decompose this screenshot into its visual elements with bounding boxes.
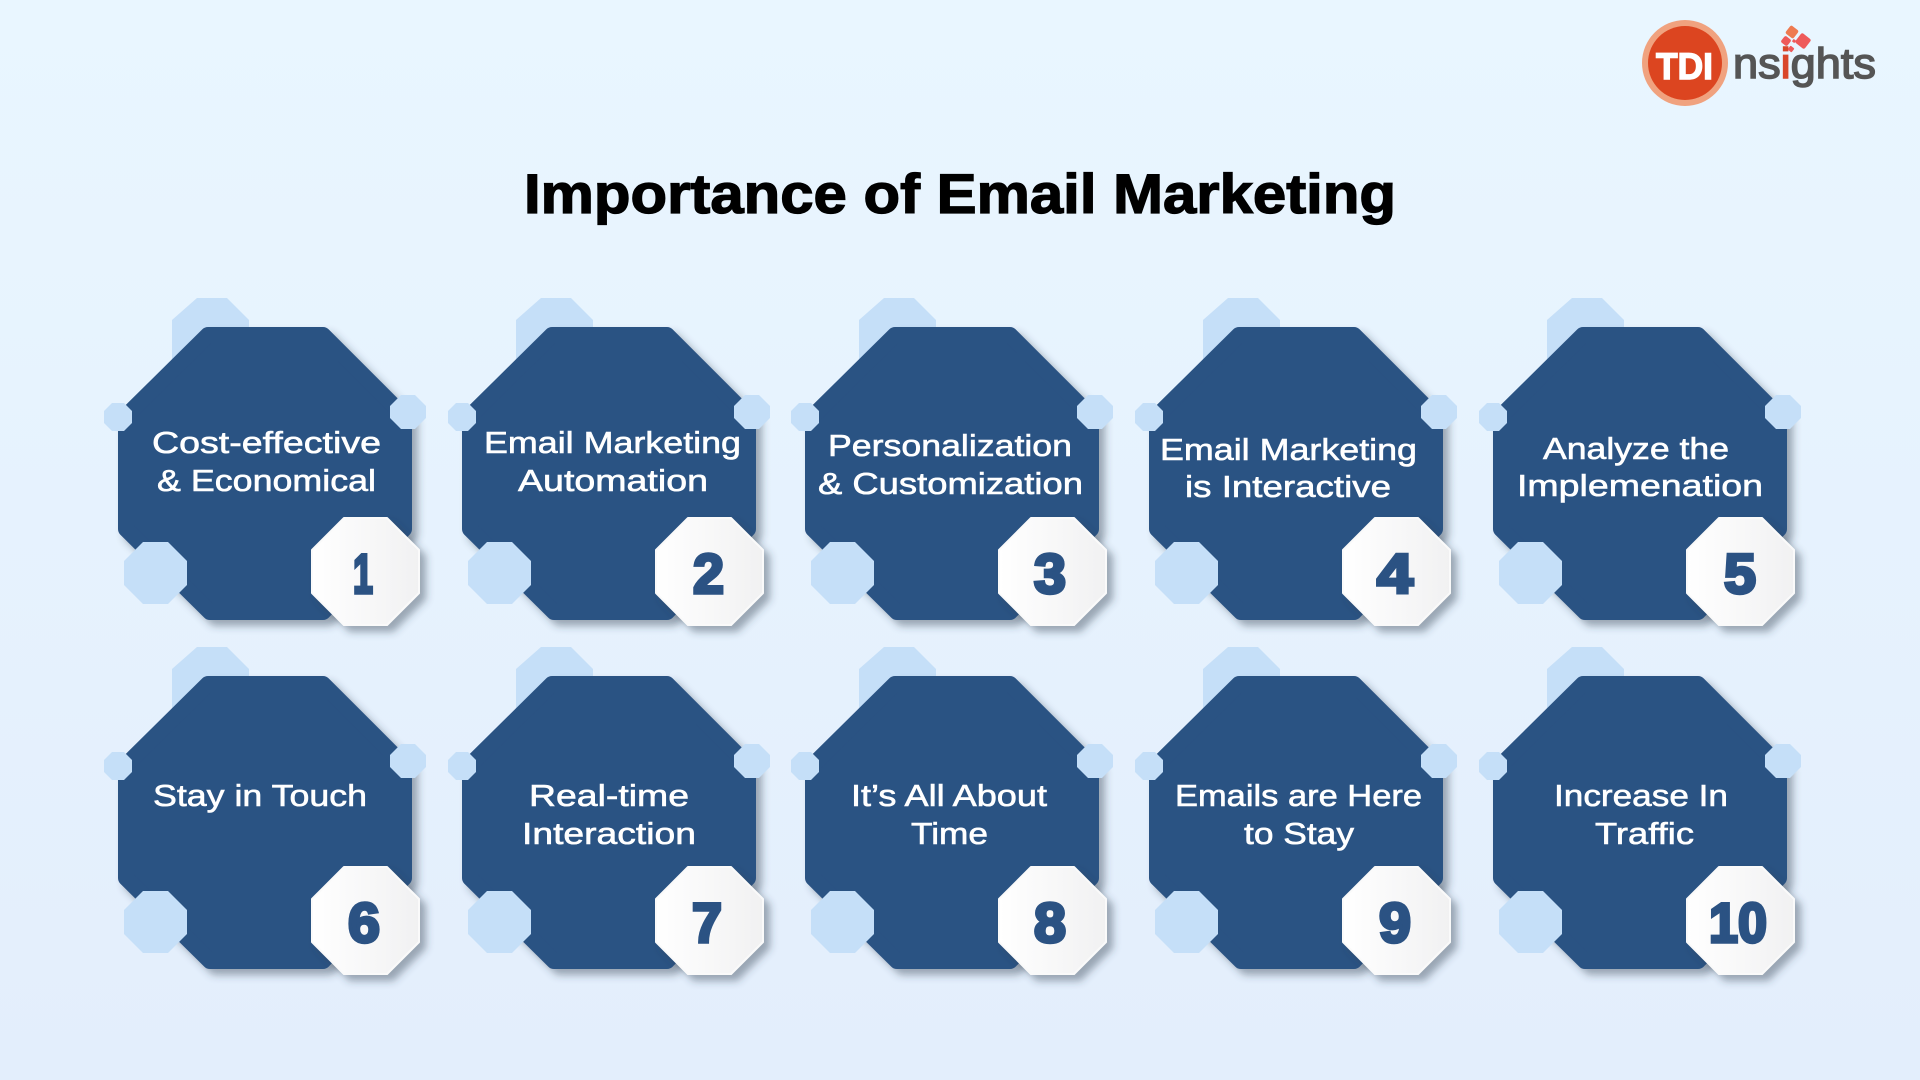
number 5: 5 [1724, 542, 1756, 605]
card text: Increase In [1554, 778, 1728, 813]
card text: Time [911, 816, 988, 851]
number 8: 8 [1034, 891, 1066, 954]
card text: Emails are Here [1175, 778, 1422, 813]
card text [522, 778, 696, 851]
number 10: 10 [1709, 891, 1767, 954]
card text: It’s All About [851, 778, 1047, 813]
card text: is Interactive [1185, 469, 1391, 504]
card text: & Customization [818, 466, 1083, 501]
card text [484, 425, 741, 498]
card text: Email Marketing [1160, 432, 1417, 467]
card text: Traffic [1595, 816, 1694, 851]
card text [1160, 432, 1417, 504]
number 1: 1 [353, 542, 373, 605]
panel: Cost-effective & Economical [104, 298, 426, 625]
panel: Stay in Touch [104, 647, 426, 974]
panel: Email Marketing Automation [448, 298, 770, 625]
panel: It's All About Time [791, 647, 1113, 974]
panel: Personalization & Customization [791, 298, 1113, 625]
card text [818, 428, 1083, 501]
logo badge: TDI [1656, 46, 1713, 87]
title: Importance of Email Marketing [524, 162, 1396, 225]
number 3: 3 [1034, 542, 1066, 605]
card text: Automation [518, 463, 708, 498]
card text: Implemenation [1517, 468, 1763, 503]
panel: Email Marketing is Interactive [1135, 298, 1457, 625]
panel: Increase In Traffic [1479, 647, 1801, 974]
card text [152, 425, 381, 498]
card text: Real-time [529, 778, 689, 813]
card text: Analyze the [1543, 431, 1729, 466]
number 2: 2 [693, 542, 724, 605]
card text: Interaction [522, 816, 696, 851]
card text [851, 778, 1047, 851]
number 6: 6 [348, 891, 380, 954]
card text: & Economical [157, 463, 376, 498]
panel: Emails are Here to Stay [1135, 647, 1457, 974]
card text: Cost-effective [152, 425, 381, 460]
number 4: 4 [1377, 542, 1413, 605]
logo badge [1642, 20, 1728, 106]
card text [1517, 431, 1763, 503]
card text: Email Marketing [484, 425, 741, 460]
logo [1642, 20, 1876, 106]
card text: Personalization [828, 428, 1072, 463]
card text: Stay in Touch [153, 778, 367, 813]
logo squares [1780, 25, 1811, 53]
card text [1175, 778, 1422, 851]
logo wordmark: nsights [1733, 40, 1876, 88]
card text: to Stay [1244, 816, 1355, 851]
panel: Analyze the Implemenation [1479, 298, 1801, 625]
card text [1554, 778, 1728, 851]
panel: Real-time Interaction [448, 647, 770, 974]
number 7: 7 [692, 891, 722, 954]
number 9: 9 [1379, 891, 1411, 954]
